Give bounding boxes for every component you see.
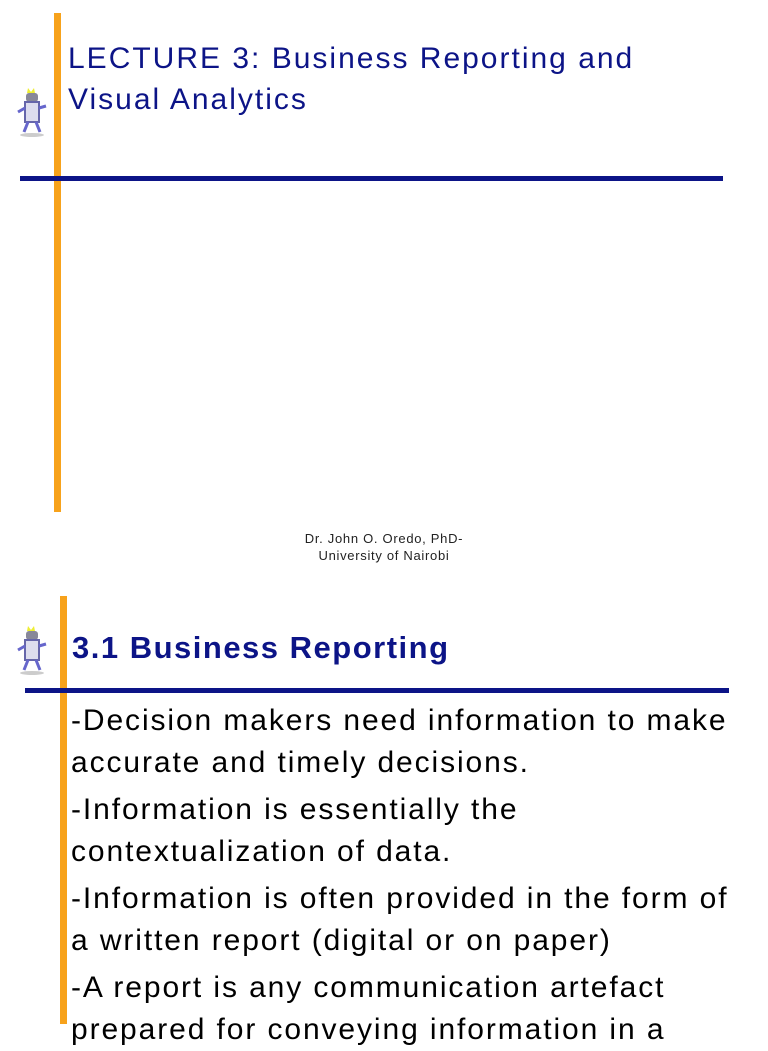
body text: prepared for conveying information in a (71, 1013, 665, 1046)
body text: contextualization of data. (71, 835, 452, 868)
footer author (305, 531, 463, 563)
footer author: University of Nairobi (318, 548, 450, 563)
navy rule slide 2 (25, 688, 729, 693)
navy rule slide 1 (20, 176, 723, 181)
body text: accurate and timely decisions. (71, 746, 530, 779)
body text: -Information is often provided in the form of (71, 882, 728, 915)
footer author: Dr. John O. Oredo, PhD- (305, 531, 463, 546)
orange bar slide 1 (54, 13, 61, 512)
body text: a written report (digital or on paper) (71, 924, 612, 957)
title slide 1: LECTURE 3: Business Reporting and (68, 42, 634, 75)
icon: robot 1 (17, 88, 46, 137)
heading slide 2: 3.1 Business Reporting (72, 630, 450, 665)
body text: -Decision makers need information to make (71, 704, 727, 737)
body text: -Information is essentially the (71, 793, 518, 826)
icon: robot 2 (17, 626, 46, 675)
orange bar slide 2 (60, 596, 67, 1024)
body text (71, 704, 728, 1046)
title slide 1: Visual Analytics (68, 83, 308, 116)
body text: -A report is any communication artefact (71, 971, 665, 1004)
title slide 1 (68, 42, 634, 116)
